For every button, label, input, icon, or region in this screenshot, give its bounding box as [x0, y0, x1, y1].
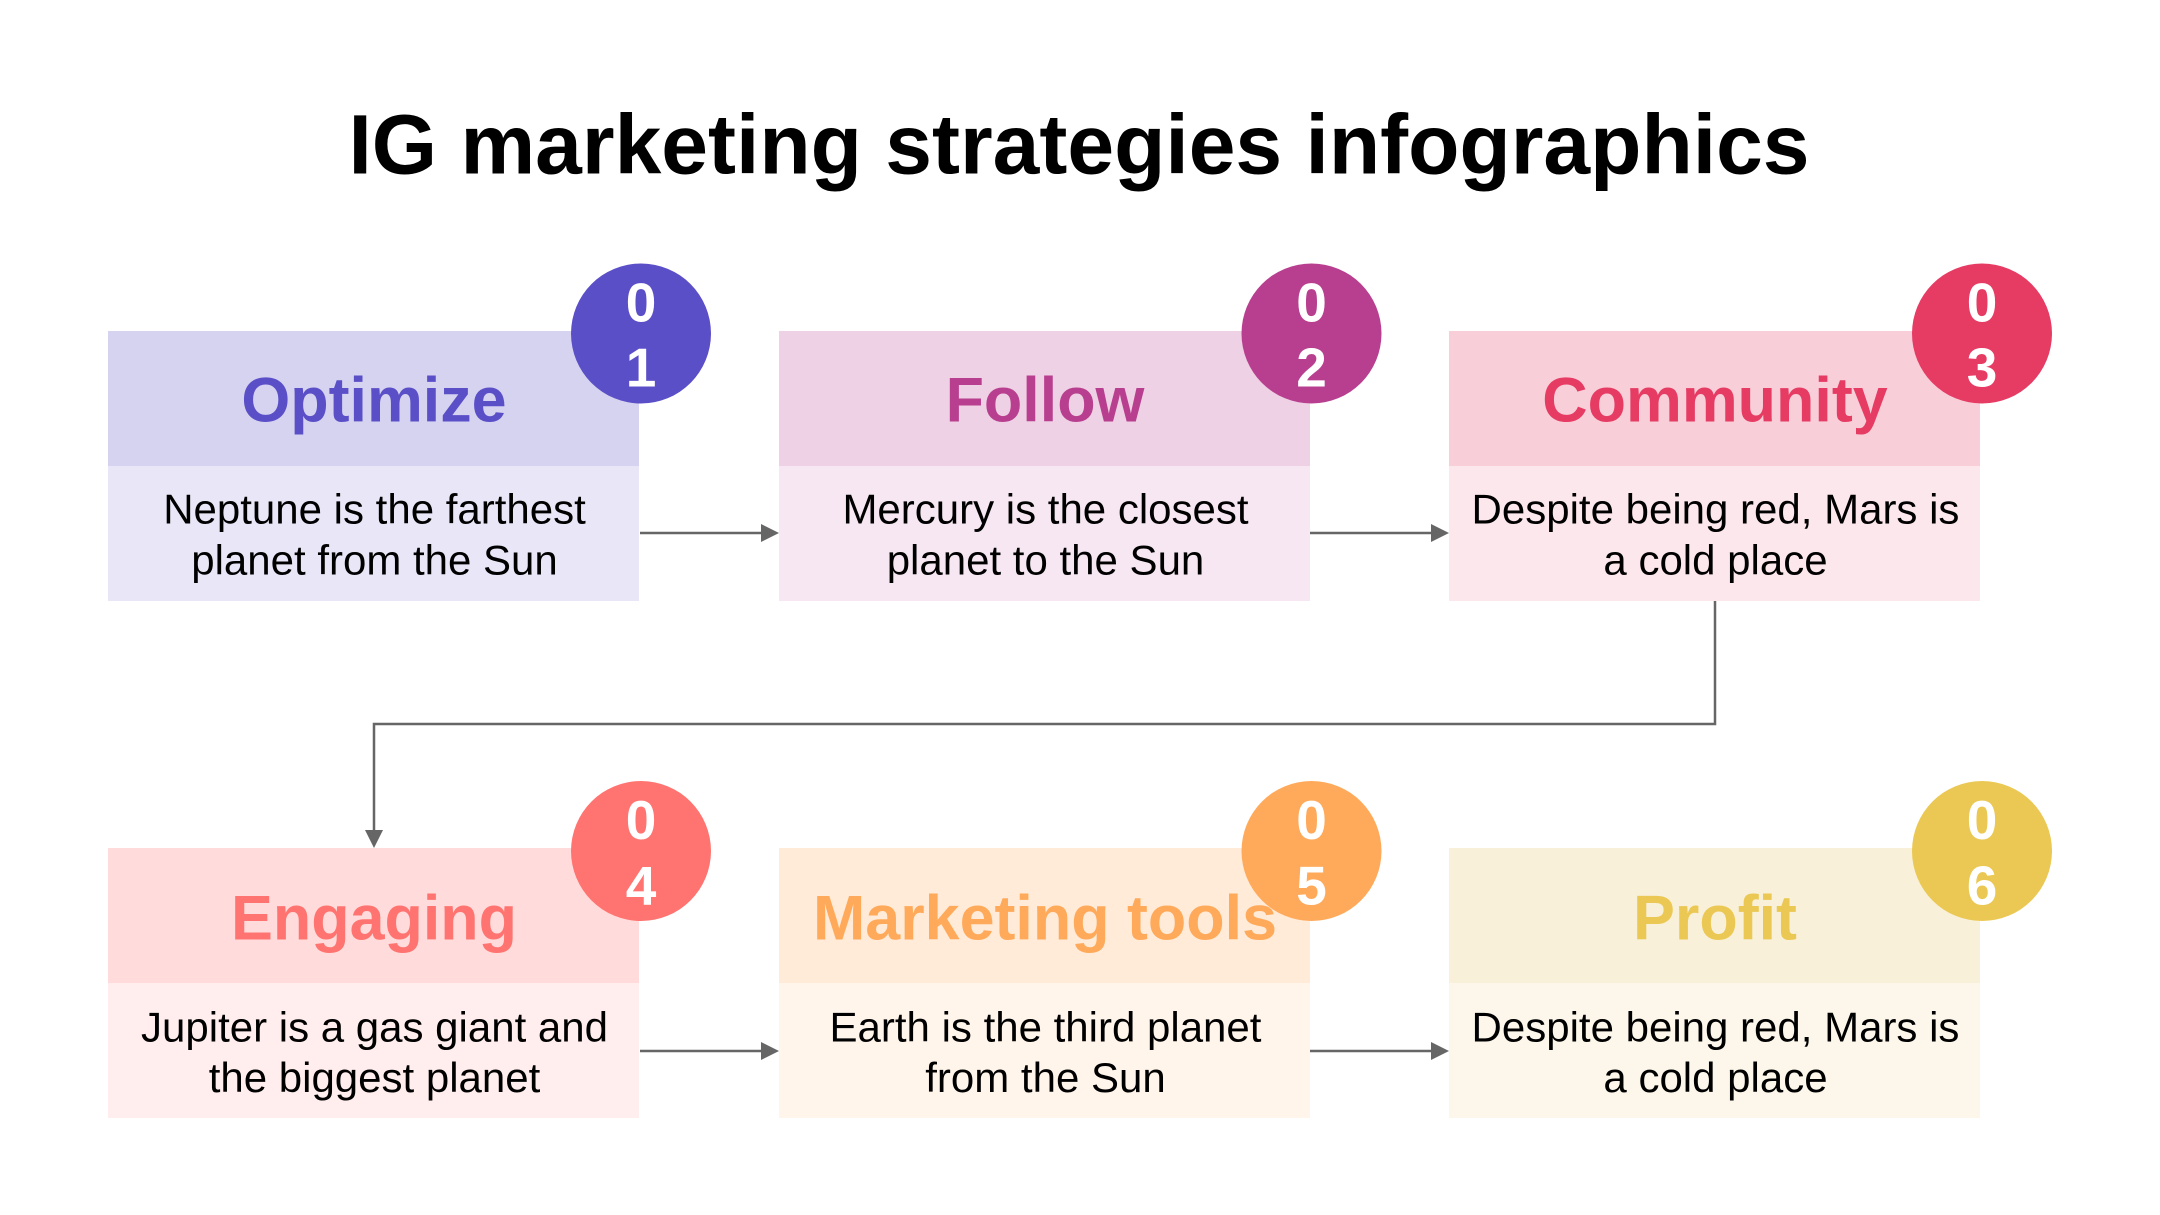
text: Follow description: Mercury is the closest	[842, 486, 1249, 533]
panel: 03 Community	[1449, 264, 2052, 601]
heading: Optimize: Optimize	[241, 366, 507, 436]
arrow: 04 to 05	[640, 1042, 779, 1060]
panel: 04 Engaging	[108, 781, 711, 1118]
badge: 01: 1	[626, 336, 656, 398]
panel: 01 Optimize	[108, 264, 711, 601]
badge: 03	[1912, 264, 2052, 404]
text: Engaging description: Jupiter is a gas giant and	[141, 1004, 608, 1051]
text: Marketing tools description: Earth is the third planet	[830, 1004, 1262, 1051]
text: Profit description: a cold place	[1603, 1054, 1828, 1101]
heading: Follow: Follow	[946, 366, 1145, 436]
badge: 06	[1912, 781, 2052, 921]
badge: 04: 0	[626, 789, 656, 851]
badge: 05: 5	[1296, 854, 1327, 916]
text: Engaging description: the biggest planet	[209, 1054, 541, 1101]
badge: 02: 0	[1296, 272, 1327, 334]
arrow: 01 to 02	[640, 524, 779, 542]
badge: 03: 3	[1967, 336, 1997, 398]
heading: Community: Community	[1542, 366, 1888, 436]
badge: 02	[1242, 264, 1382, 404]
text: Community description: a cold place	[1603, 537, 1828, 584]
panel: 05 Marketing tools	[779, 781, 1382, 1118]
badge: 06: 6	[1967, 854, 1997, 916]
arrow: 05 to 06	[1310, 1042, 1449, 1060]
badge: 02: 2	[1296, 336, 1327, 398]
badge: 03: 0	[1967, 272, 1997, 334]
text: Marketing tools description: from the Sun	[925, 1054, 1166, 1101]
panel: 02 Follow	[779, 264, 1382, 601]
text: Community description: Despite being red, Mars is	[1472, 486, 1959, 533]
arrow: 02 to 03	[1310, 524, 1449, 542]
text: Profit description: Despite being red, Mars is	[1472, 1004, 1959, 1051]
heading: Profit: Profit	[1633, 884, 1797, 954]
badge: 05: 0	[1296, 789, 1327, 851]
text: Follow description: planet to the Sun	[887, 537, 1204, 584]
title: IG marketing strategies infographics	[348, 98, 1810, 192]
badge: 01: 0	[626, 272, 656, 334]
badge: 01	[571, 264, 711, 404]
badge: 04	[571, 781, 711, 921]
text: Optimize description: Neptune is the farthest	[163, 486, 586, 533]
badge: 04: 4	[626, 854, 657, 916]
arrow: 03 to 04	[365, 601, 1715, 848]
panel: 06 Profit	[1449, 781, 2052, 1118]
heading: Marketing tools: Marketing tools	[813, 884, 1277, 954]
badge: 05	[1242, 781, 1382, 921]
text: Optimize description: planet from the Sun	[191, 537, 558, 584]
heading: Engaging: Engaging	[231, 884, 517, 954]
badge: 06: 0	[1967, 789, 1997, 851]
